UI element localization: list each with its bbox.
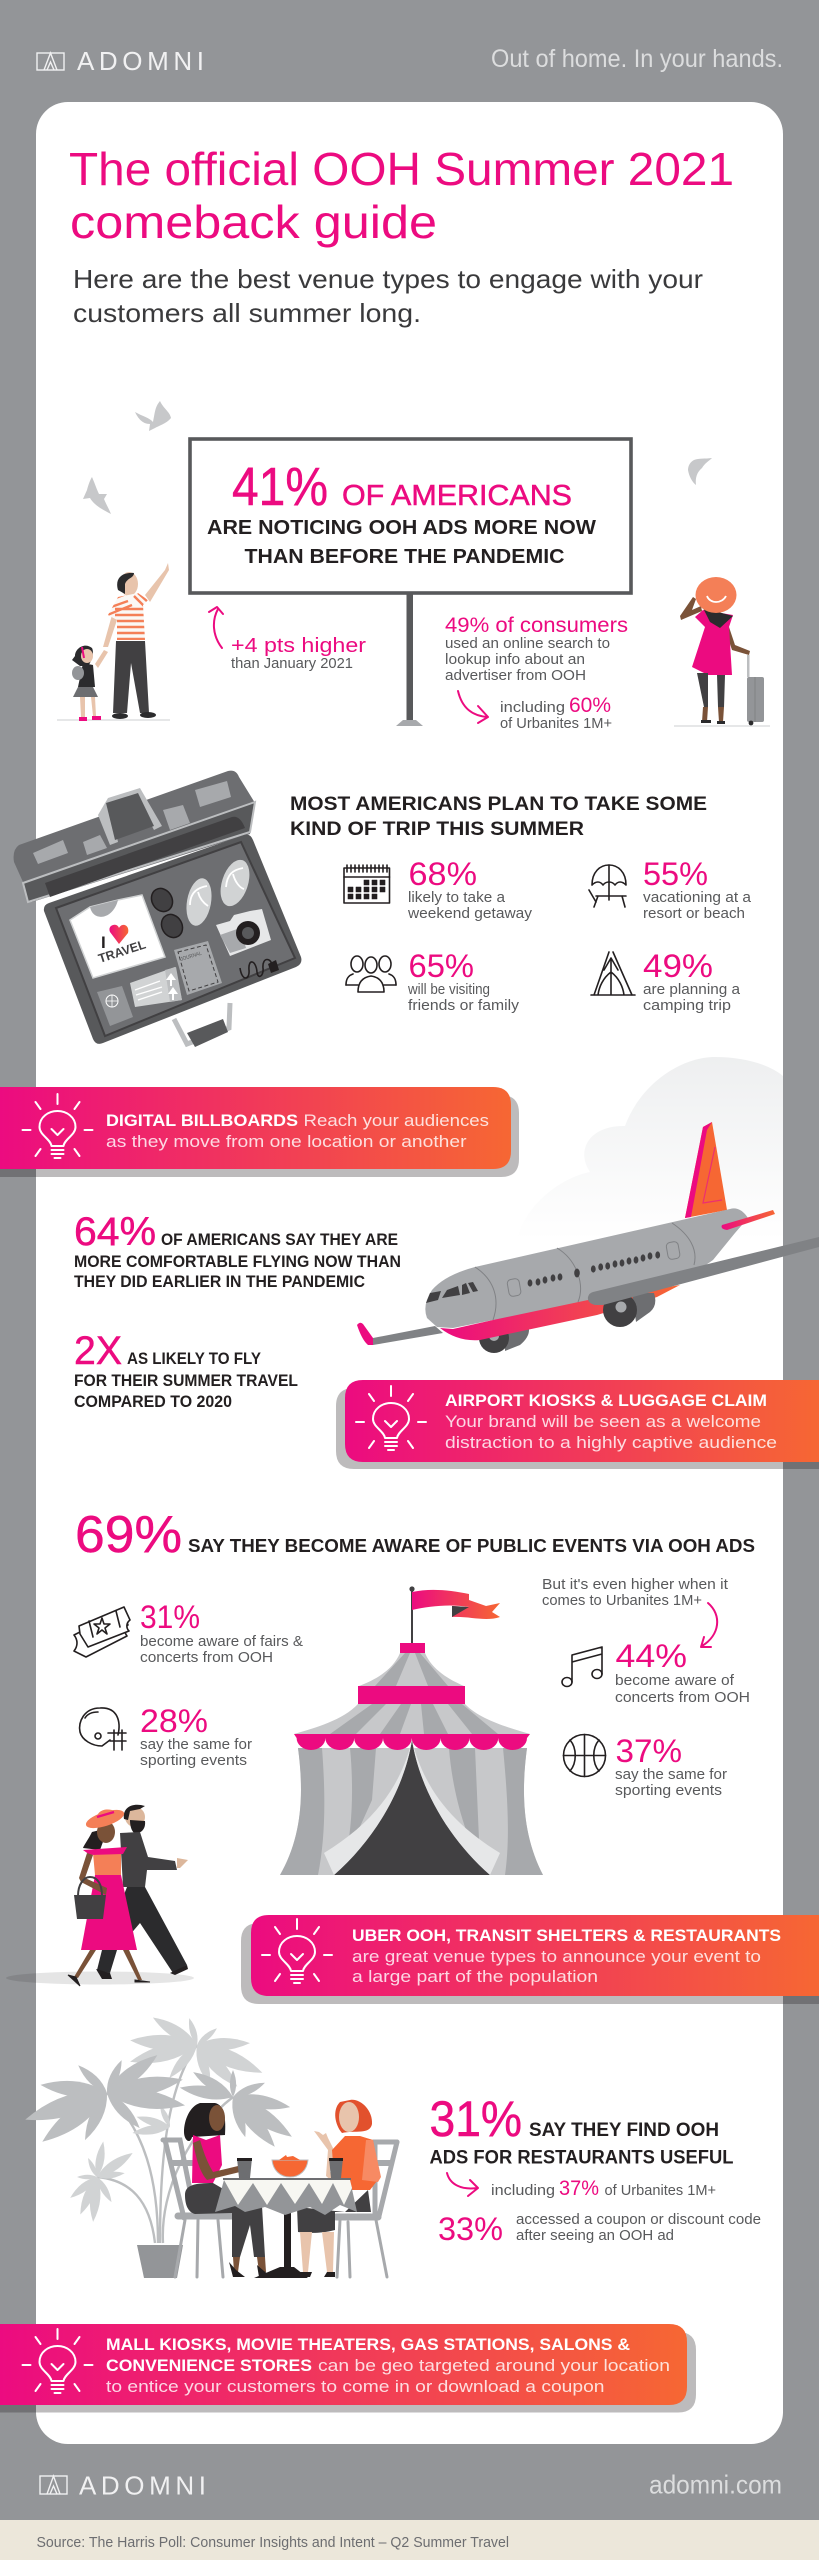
- stat: 2X: [74, 1329, 298, 1411]
- subtitle: [73, 264, 703, 328]
- stat: +4 pts higher: [231, 635, 366, 672]
- coffee cups: [237, 2158, 343, 2178]
- banner: airport kiosks: [336, 1380, 819, 1469]
- windows: [426, 1251, 660, 1303]
- stat: 37%: [615, 1733, 727, 1799]
- illustration: circus tent: [280, 1586, 543, 1875]
- heading: trip plans: MOST AMERICANS PLAN TO TAKE SOME: [290, 793, 707, 815]
- banner text: Reach your audiences: [304, 1111, 489, 1130]
- stat: 2X: 2X: [74, 1329, 122, 1373]
- footer logo: ADOMNI: [79, 2470, 206, 2500]
- handle: [174, 1003, 230, 1047]
- stat: 31%: 31%: [140, 1599, 200, 1635]
- banner text: to entice your customers to come in or download a coupon: [106, 2377, 604, 2396]
- chairs: [163, 2140, 397, 2277]
- illustration: walking couple: [6, 1805, 194, 1986]
- stat: 65%: friends or family: [408, 997, 520, 1014]
- stat: 44%: [615, 1638, 750, 1706]
- stat: 33% coupon: accessed a coupon or discount code: [516, 2211, 761, 2228]
- stat: including 37%: 37%: [559, 2177, 599, 2200]
- stat: 64% flying: THEY DID EARLIER IN THE PANDEMIC: [74, 1273, 365, 1291]
- stat: 28%: sporting events: [140, 1752, 247, 1769]
- stat: 33% coupon: [438, 2211, 761, 2247]
- heading: 69%: [75, 1506, 755, 1564]
- banner text: distraction to a highly captive audience: [445, 1433, 777, 1452]
- icon: tickets: [74, 1607, 130, 1657]
- t-shirt: TRAVEL: [97, 937, 148, 966]
- stat: 49% of consumers: [445, 614, 628, 684]
- table: [215, 2178, 357, 2278]
- stat: 44%: concerts from OOH: [615, 1689, 750, 1706]
- banner text: can be geo targeted around your location: [318, 2356, 670, 2375]
- icon: camping tent: [591, 952, 635, 995]
- stat: 64% flying: MORE COMFORTABLE FLYING NOW THAN: [74, 1253, 401, 1271]
- banner text: CONVENIENCE STORES: [106, 2357, 312, 2375]
- stat: 31%: concerts from OOH: [140, 1649, 273, 1666]
- camera: [216, 909, 271, 956]
- stat: 31% restaurants: [430, 2091, 734, 2168]
- banner: digital billboards: [0, 1087, 519, 1177]
- stat: 33% coupon: 33%: [438, 2211, 503, 2247]
- illustration: women at cafe table: [163, 2100, 397, 2278]
- icon: light bulb: [262, 1919, 332, 1983]
- stat: 44%: 44%: [616, 1638, 687, 1674]
- icon: calendar: [344, 865, 390, 903]
- pot: [137, 2245, 183, 2278]
- arrow down: [458, 691, 488, 723]
- illustration: airplane: [357, 1122, 819, 1353]
- right woman: [296, 2100, 381, 2277]
- fuselage: [425, 1208, 748, 1328]
- note: urbanites: But it's even higher when it: [542, 1576, 729, 1593]
- banner text: Your brand will be seen as a welcome: [445, 1412, 761, 1431]
- heading: trip plans: KIND OF TRIP THIS SUMMER: [290, 818, 584, 840]
- tent upper roof: [359, 1653, 464, 1686]
- billboard pole: [396, 593, 423, 726]
- illustration: potted plant: [22, 2012, 296, 2278]
- t-shirt: I: [101, 933, 106, 952]
- journal: JOURNAL: [180, 951, 203, 963]
- heading: trip plans: [290, 793, 707, 840]
- title: [69, 143, 734, 248]
- banner text: [106, 1111, 489, 1151]
- illustration: open suitcase: [14, 771, 301, 1047]
- stat: 55%: 55%: [643, 856, 708, 892]
- stat: 64% flying: 64%: [74, 1210, 156, 1254]
- stat: 64% flying: OF AMERICANS SAY THEY ARE: [161, 1231, 398, 1249]
- stat: 65%: will be visiting: [407, 981, 490, 998]
- source bar: [0, 2520, 819, 2560]
- stat: 65%: 65%: [408, 948, 474, 984]
- note: urbanites: [542, 1576, 729, 1609]
- icon: beach umbrella and chair: [589, 865, 626, 907]
- plant stems: [97, 2045, 233, 2243]
- icon: basketball: [564, 1734, 606, 1776]
- stat: 68%: weekend getaway: [407, 905, 533, 922]
- doors: [507, 1241, 680, 1297]
- stat: 31%: become aware of fairs &: [140, 1633, 303, 1650]
- stat: including 60%: of Urbanites 1M+: [500, 715, 612, 732]
- subtitle: customers all summer long.: [73, 298, 421, 328]
- illustration: father and daughter: [57, 563, 170, 721]
- tent scallops: [294, 1734, 530, 1750]
- icon: music notes: [562, 1647, 602, 1686]
- man: [96, 1805, 188, 1979]
- billboard text: ARE NOTICING OOH ADS MORE NOW: [207, 517, 596, 539]
- rear stabilizer: [722, 1210, 775, 1230]
- title: The official OOH Summer 2021: [69, 143, 734, 195]
- arrow to 44%: [701, 1603, 717, 1647]
- banner text: a large part of the population: [352, 1967, 598, 1986]
- cloud: [517, 1057, 783, 1240]
- stat: including 60%: [500, 694, 612, 732]
- note: urbanites: comes to Urbanites 1M+: [542, 1592, 702, 1609]
- stat: 37%: sporting events: [615, 1782, 722, 1799]
- stat: including 37%: including: [491, 2182, 555, 2199]
- stat: 44%: become aware of: [615, 1672, 735, 1689]
- icon: group of people: [346, 956, 396, 992]
- illustration: woman with suitcase: [674, 577, 770, 727]
- header logo: ADOMNI: [77, 46, 204, 76]
- billboard: [190, 439, 631, 726]
- banner: uber ooh: [241, 1915, 819, 2004]
- belly: [440, 1285, 680, 1340]
- right wing: [588, 1237, 819, 1305]
- billboard text: [207, 517, 596, 568]
- flag: [409, 1586, 500, 1644]
- stat: 55%: resort or beach: [643, 905, 745, 922]
- stat: 49%: are planning a: [643, 981, 741, 998]
- stat: including 60%: 60%: [569, 694, 611, 717]
- stat: +4 pts higher: +4 pts higher: [231, 635, 366, 657]
- stat: including 37%: of Urbanites 1M+: [604, 2182, 716, 2199]
- stat: 49%: [643, 948, 741, 1014]
- charger cable: [240, 960, 272, 978]
- stat: including 60%: including: [500, 699, 565, 716]
- heading: 69%: 69%: [75, 1506, 182, 1564]
- stat: 68%: [407, 856, 533, 922]
- boarding passes: [130, 967, 182, 1007]
- stat: 49% of consumers: advertiser from OOH: [445, 667, 586, 684]
- stat: 37%: say the same for: [615, 1766, 727, 1783]
- banner text: are great venue types to announce your event to: [352, 1947, 761, 1966]
- icon: light bulb: [356, 1386, 426, 1450]
- stat: 49%: 49%: [643, 948, 713, 984]
- stat: 31% restaurants: 31%: [430, 2091, 522, 2147]
- stat: 37%: 37%: [616, 1733, 682, 1769]
- icon: football helmet: [80, 1708, 126, 1750]
- source text: Source: The Harris Poll: Consumer Insights and Intent – Q2 Summer Travel: [36, 2534, 509, 2551]
- tent lower roof: [294, 1704, 530, 1734]
- stat: 28%: [140, 1703, 252, 1769]
- right wheel: [603, 1293, 655, 1327]
- stat: 31%: [140, 1599, 303, 1666]
- birds: [83, 401, 712, 514]
- banner text: [106, 2336, 670, 2396]
- stat: 2X: AS LIKELY TO FLY: [127, 1350, 261, 1368]
- tail fin: [685, 1122, 727, 1218]
- icon: light bulb: [22, 1094, 92, 1158]
- bowl: [272, 2155, 308, 2177]
- tent walls: [280, 1748, 543, 1875]
- flip flops: [183, 856, 255, 928]
- t-shirt: [70, 895, 165, 978]
- title: comeback guide: [70, 196, 437, 248]
- seams: [475, 1223, 695, 1320]
- stat: 64% flying: [74, 1210, 401, 1291]
- banner text: AIRPORT KIOSKS & LUGGAGE CLAIM: [445, 1392, 767, 1410]
- stat: 49% of consumers: 49% of consumers: [445, 614, 628, 637]
- stat: 65%: [407, 948, 520, 1014]
- subtitle: Here are the best venue types to engage with your: [73, 264, 703, 294]
- journal: [174, 941, 222, 995]
- stat: 31% restaurants: ADS FOR RESTAURANTS USEFUL: [430, 2148, 734, 2168]
- banner text: [352, 1927, 781, 1986]
- stat: 2X: FOR THEIR SUMMER TRAVEL: [74, 1372, 298, 1390]
- footer url: adomni.com: [649, 2470, 782, 2500]
- stat: 55%: vacationing at a: [643, 889, 752, 906]
- stat: 68%: 68%: [408, 856, 477, 892]
- stat: 49% of consumers: used an online search to: [445, 635, 610, 652]
- tent top cap: [400, 1643, 425, 1653]
- stat: +4 pts higher: than January 2021: [231, 655, 353, 672]
- stat: 28%: say the same for: [140, 1736, 252, 1753]
- billboard text: THAN BEFORE THE PANDEMIC: [244, 546, 564, 568]
- lid: [14, 771, 255, 902]
- header tagline: Out of home. In your hands.: [491, 45, 783, 73]
- billboard headline: [232, 457, 572, 517]
- tent curtains: [324, 1740, 500, 1875]
- stat: 28%: 28%: [140, 1703, 208, 1739]
- tent pink band: [358, 1686, 465, 1704]
- stat: 55%: [643, 856, 752, 922]
- leaves back: [68, 2012, 266, 2222]
- stat: 2X: COMPARED TO 2020: [74, 1393, 232, 1411]
- banner text: UBER OOH, TRANSIT SHELTERS & RESTAURANTS: [352, 1927, 781, 1945]
- stat: including 37%: [491, 2177, 716, 2200]
- left wing: [373, 1326, 443, 1345]
- banner text: DIGITAL BILLBOARDS: [106, 1112, 298, 1130]
- woman: [68, 1806, 150, 1986]
- stat: 49% of consumers: lookup info about an: [445, 651, 585, 668]
- stat: 49%: camping trip: [643, 997, 731, 1014]
- tent doorway: [334, 1740, 490, 1875]
- arrow to urbanites: [447, 2173, 478, 2196]
- billboard headline: 41%: [232, 457, 328, 517]
- arrow up: [209, 607, 223, 648]
- case body: [44, 835, 301, 1044]
- banner text: as they move from one location or another: [106, 1132, 467, 1151]
- banner text: [445, 1392, 777, 1452]
- heading: 69%: SAY THEY BECOME AWARE OF PUBLIC EVENTS VIA OOH ADS: [188, 1535, 755, 1556]
- left wheel: [479, 1323, 529, 1353]
- passport: [97, 986, 133, 1026]
- leaves front: [22, 2049, 296, 2152]
- billboard frame: [190, 439, 631, 593]
- banner text: MALL KIOSKS, MOVIE THEATERS, GAS STATIONS, SALONS &: [106, 2336, 630, 2354]
- billboard headline: OF AMERICANS: [342, 480, 572, 512]
- stat: 33% coupon: after seeing an OOH ad: [516, 2227, 674, 2244]
- banner: mall kiosks: [0, 2324, 696, 2412]
- stat: 68%: likely to take a: [408, 889, 506, 906]
- stat: 31% restaurants: SAY THEY FIND OOH: [529, 2120, 719, 2141]
- sunglasses: [147, 885, 187, 941]
- left woman: [184, 2103, 272, 2277]
- icon: light bulb: [22, 2329, 92, 2393]
